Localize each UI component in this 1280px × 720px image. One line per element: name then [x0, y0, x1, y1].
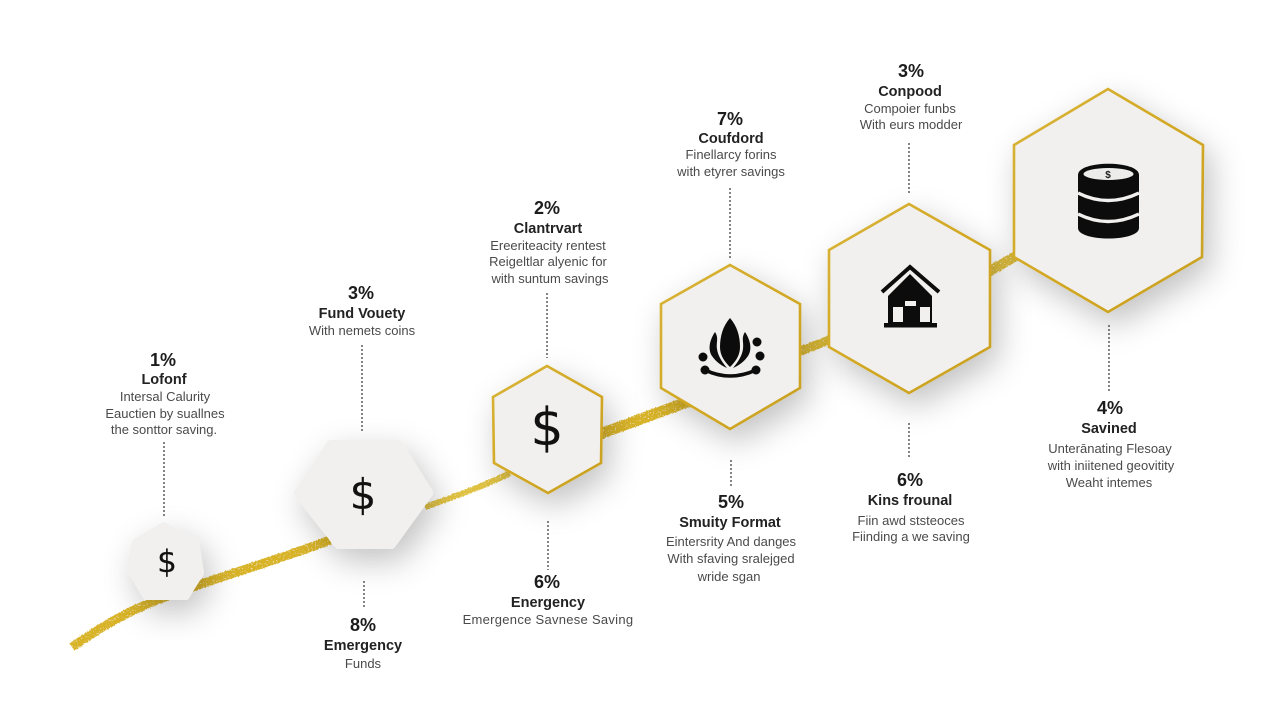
text: step 4 upper: with etyrer savings	[676, 164, 785, 179]
text: step 5 upper: Compoier funbs	[864, 101, 956, 116]
text: step 5 upper	[860, 61, 963, 132]
text: step 6: Unterānating Flesoay	[1048, 441, 1172, 456]
text: step 1: 1%	[150, 350, 176, 370]
text: step 3 upper: with suntum savings	[490, 271, 609, 286]
text: step 3 upper: Ereeriteacity rentest	[490, 238, 606, 253]
text: step 6: Weaht intemes	[1066, 475, 1153, 490]
text: step 1: Intersal Calurity	[120, 389, 211, 404]
hexagon 5	[829, 204, 990, 393]
text: step 3 lower: 6%	[534, 572, 560, 592]
text: step 4 lower: Eintersrity And danges	[666, 534, 797, 549]
text: step 5 lower: Kins frounal	[868, 493, 952, 509]
connector 6	[1108, 325, 1110, 391]
text: step 3 upper: Clantrvart	[514, 221, 582, 237]
text: step 4 lower: 5%	[718, 492, 744, 512]
text: step 2 upper: With nemets coins	[309, 323, 416, 338]
text: step 4 upper: Finellarcy forins	[685, 147, 777, 162]
text: step 4 upper	[676, 109, 785, 179]
text: step 4 lower: Smuity Format	[679, 515, 781, 531]
icon: coin stack: $	[1105, 170, 1111, 181]
icon: dollar 1: $	[157, 544, 177, 580]
text: step 3 lower: Energency	[511, 595, 585, 611]
step 3: hexagon and labels	[463, 198, 633, 627]
text: step 4 lower	[666, 492, 797, 584]
text: step 3 upper	[489, 198, 609, 286]
hexagon 4	[661, 265, 800, 429]
text: step 2 upper: Fund Vouety	[319, 306, 405, 322]
icon: dollar 2: $	[350, 470, 376, 519]
text: step 2 upper	[309, 283, 416, 338]
text: step 3 upper: 2%	[534, 198, 560, 218]
text: step 6: 4%	[1097, 398, 1123, 418]
step 5: hexagon and labels	[829, 61, 990, 544]
step 1: hexagon and labels	[105, 350, 225, 597]
text: step 2 upper: 3%	[348, 283, 374, 303]
text: step 2 lower: 8%	[350, 615, 376, 635]
gold growth path	[72, 255, 1018, 647]
icon: coin stack	[1078, 164, 1139, 238]
hexagon 6	[1014, 89, 1203, 312]
connector 2 top	[361, 345, 363, 432]
text: step 4 upper: Coufdord	[698, 131, 764, 147]
hexagon 2	[299, 445, 428, 544]
text: step 3 lower: Emergence Savnese Saving	[463, 612, 633, 627]
text: step 5 upper: With eurs modder	[860, 117, 963, 132]
text: step 1: the sonttor saving.	[111, 422, 217, 437]
text: step 6: Savined	[1081, 421, 1137, 437]
text: step 3 lower	[463, 572, 633, 627]
text: step 3 upper: Reigeltlar alyenic for	[489, 254, 608, 269]
hexagon 1	[129, 525, 201, 597]
step 6: hexagon and labels	[1014, 89, 1203, 490]
connector 4 bottom	[730, 460, 732, 488]
connector 5 bottom	[908, 423, 910, 458]
text: step 5 lower: Fiin awd ststeoces	[858, 513, 965, 528]
text: step 2 lower: Funds	[345, 656, 382, 671]
text: step 4 lower: wride sgan	[697, 569, 760, 584]
text: step 5 lower: 6%	[897, 470, 923, 490]
text: step 5 lower: Fiinding a we saving	[852, 529, 970, 544]
connector 5 top	[908, 143, 910, 195]
icon: lotus flame	[698, 318, 764, 376]
connector 4 top	[729, 188, 731, 258]
text: step 2 lower: Emergency	[324, 638, 402, 654]
connector 1	[163, 442, 165, 518]
icon: house	[882, 267, 939, 328]
text: step 2 lower	[324, 615, 402, 671]
text: step 4 upper: 7%	[717, 109, 743, 129]
text: step 1: Lofonf	[141, 372, 187, 388]
text: step 5 lower	[852, 470, 970, 544]
text: step 6: with iniitened geovitity	[1047, 458, 1175, 473]
icon: dollar 3: $	[530, 398, 564, 458]
connector 2 bottom	[363, 581, 365, 608]
connector 3 bottom	[547, 521, 549, 570]
text: step 1: Eauctien by suallnes	[105, 406, 225, 421]
text: step 5 upper: Conpood	[878, 84, 942, 100]
step 2: hexagon and labels	[299, 283, 428, 671]
step 4: hexagon and labels	[661, 109, 800, 584]
text: step 1	[105, 350, 225, 437]
text: step 5 upper: 3%	[898, 61, 924, 81]
connector 3 top	[546, 293, 548, 358]
text: step 4 lower: With sfaving sralejged	[667, 551, 795, 566]
hexagon 3	[493, 366, 602, 493]
text: step 6	[1047, 398, 1175, 490]
